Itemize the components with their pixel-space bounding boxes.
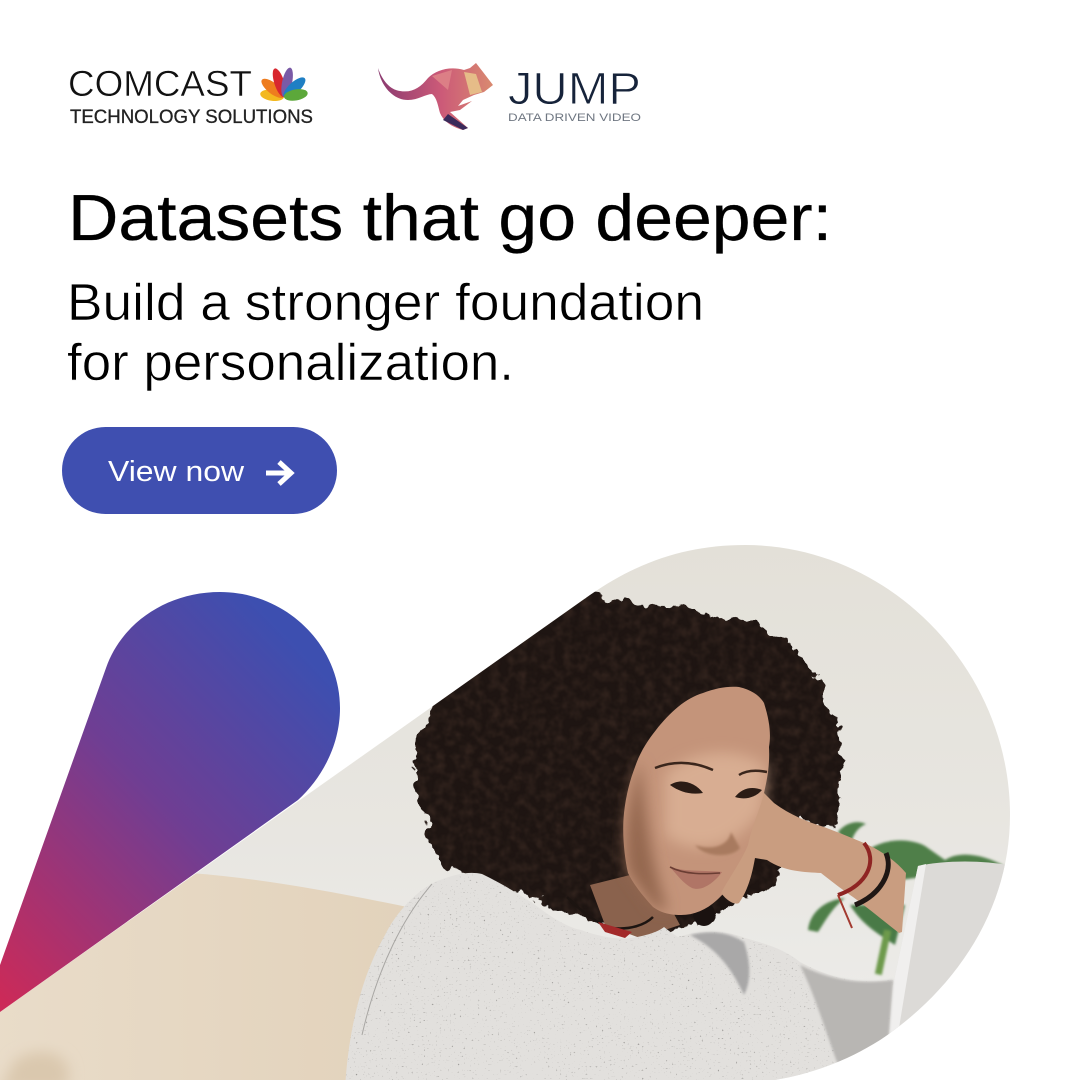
icon: kangaroo: [378, 63, 493, 130]
button: view now: View now: [108, 456, 245, 488]
subtitle: [67, 274, 704, 392]
mouth: [670, 867, 722, 889]
nose shadow: [695, 832, 740, 855]
logo: Comcast Technology Solutions: TECHNOLOGY SOLUTIONS: [70, 106, 313, 128]
subtitle: for personalization.: [67, 334, 514, 392]
title: Datasets that go deeper:: [68, 181, 832, 254]
laptop: [900, 862, 1005, 1026]
curls under chin: [693, 906, 714, 926]
logo: Comcast Technology Solutions: [68, 63, 313, 128]
eyes and brows: [655, 763, 767, 798]
face: [623, 687, 770, 915]
logo: JUMP Data Driven Video: DATA DRIVEN VIDEO: [508, 112, 642, 124]
logo: JUMP Data Driven Video: [378, 63, 642, 130]
neck: [590, 870, 680, 938]
subtitle: Build a stronger foundation: [67, 274, 704, 332]
icon: arrow: [266, 462, 291, 484]
plant: [808, 822, 1004, 975]
sweater shading: [690, 932, 749, 995]
bracelets: [838, 843, 888, 928]
sweater: [345, 873, 893, 1080]
necklace: [567, 897, 653, 928]
wall background: [196, 545, 1010, 986]
icon: peacock: [259, 67, 309, 102]
hand and arm: [721, 793, 906, 933]
logo: JUMP Data Driven Video: JUMP: [508, 63, 641, 114]
button: view now: [62, 427, 337, 514]
couch: [0, 873, 412, 1080]
hair: [414, 596, 844, 929]
photo: woman looking at laptop in teardrop shape: [0, 540, 1080, 1080]
gradient teardrop shape: [0, 592, 340, 1012]
logo: Comcast Technology Solutions: COMCAST: [68, 63, 252, 104]
